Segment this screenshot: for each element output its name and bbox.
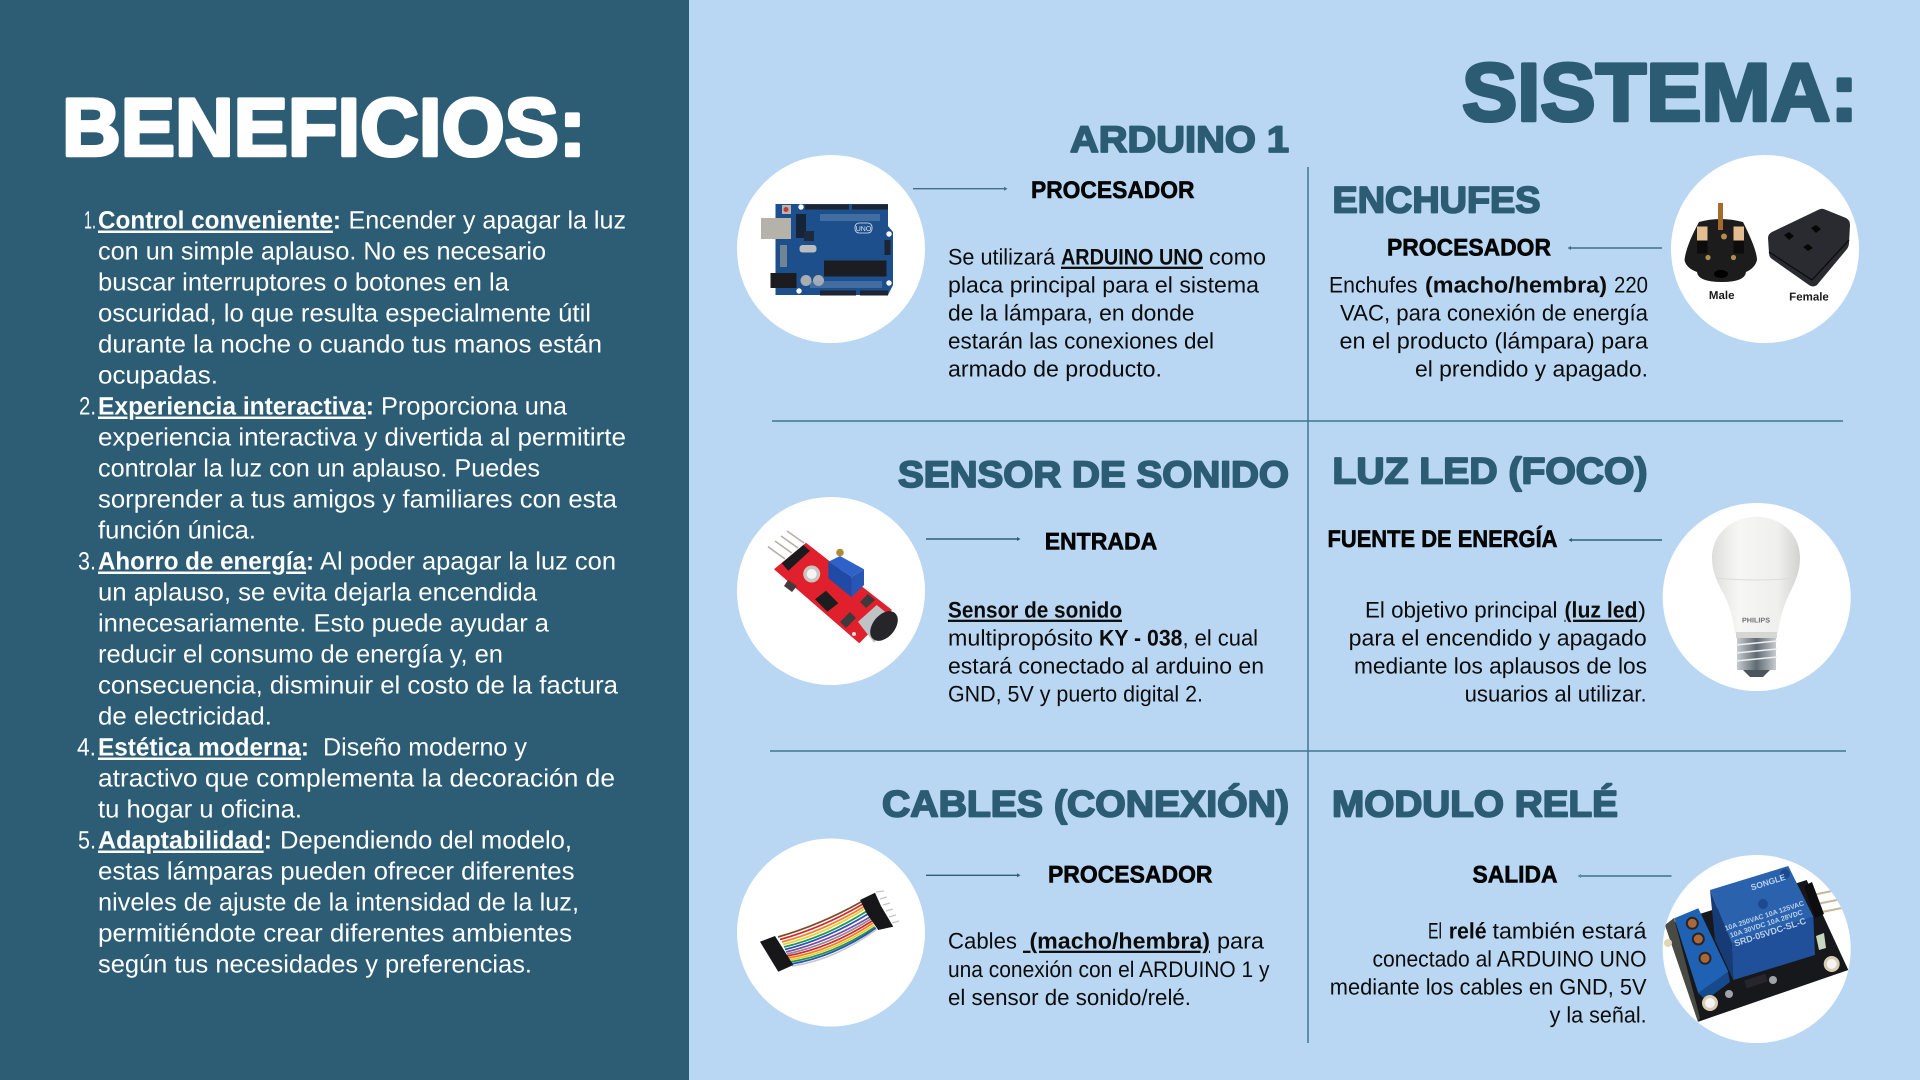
heading: arduino 1: ARDUINO 1 <box>1070 119 1289 160</box>
icon: plugs <box>1671 155 1859 343</box>
benefit 2: experiencia interactiva: experiencia interactiva y divertida al permitirte <box>98 424 626 452</box>
text: cables description <box>948 929 1270 1010</box>
benefit 1: control conveniente: Control conveniente: <box>98 206 341 234</box>
benefit 3: ahorro de energia: consecuencia, disminuir el costo de la factura <box>98 672 618 700</box>
text: led description: mediante los aplausos de los <box>1354 654 1647 679</box>
label: fuente de energia: FUENTE DE ENERGÍA <box>1328 525 1558 553</box>
section: enchufes <box>1329 155 1859 382</box>
text: arduino description: placa principal para el sistema <box>948 273 1259 298</box>
label: procesador: PROCESADOR <box>1048 862 1212 889</box>
heading: cables: CABLES (CONEXIÓN) <box>882 784 1289 824</box>
benefit 4: estetica moderna: Estética moderna: <box>98 734 309 762</box>
text: relay description: El <box>1428 919 1442 944</box>
benefit 3: ahorro de energia: Al poder apagar la luz con <box>320 548 616 576</box>
heading: luz led: LUZ LED (FOCO) <box>1332 450 1648 492</box>
text: sensor description: , el cual <box>1182 626 1258 651</box>
text: arduino description: armado de producto. <box>948 357 1162 382</box>
benefit 3: ahorro de energia: un aplauso, se evita dejarla encendida <box>98 578 537 606</box>
icon: led bulb <box>1663 503 1851 691</box>
arrow <box>926 537 1020 541</box>
text: cables description: una conexión con el ARDUINO 1 y <box>948 957 1270 982</box>
heading: modulo rele: MODULO RELÉ <box>1332 784 1618 824</box>
benefit 5: adaptabilidad: Adaptabilidad: <box>98 826 272 854</box>
heading: BENEFICIOS: BENEFICIOS: <box>62 82 586 174</box>
text: arduino description: como <box>1209 245 1266 270</box>
benefit 2: experiencia interactiva: 2. <box>79 392 96 420</box>
text: sensor description: Sensor de sonido <box>948 598 1122 623</box>
benefit 2: experiencia interactiva: Proporciona una <box>381 392 567 420</box>
text: led description: (luz led <box>1564 598 1638 623</box>
text: relay description: relé <box>1449 919 1487 944</box>
benefit 5: adaptabilidad: estas lámparas pueden ofrecer diferentes <box>98 858 574 886</box>
benefit 2: experiencia interactiva <box>79 392 626 544</box>
icon: plugs: Male <box>1709 290 1734 302</box>
benefit 1: control conveniente: ocupadas. <box>98 362 218 390</box>
heading: SISTEMA: SISTEMA: <box>1462 48 1858 138</box>
benefit 1: control conveniente: con un simple aplauso. No es necesario <box>98 238 546 266</box>
arrow <box>1578 874 1672 878</box>
benefit 5: adaptabilidad: permitiéndote crear diferentes ambientes <box>98 920 572 948</box>
label: salida: SALIDA <box>1472 862 1558 889</box>
arrow <box>1568 538 1662 542</box>
text: arduino description: de la lámpara, en donde <box>948 301 1194 326</box>
benefit 2: experiencia interactiva: Experiencia interactiva: <box>98 392 374 420</box>
benefit 3: ahorro de energia: 3. <box>78 548 96 576</box>
icon: relay module: 10A 250VAC 10A 125VAC <box>1724 900 1805 933</box>
benefit 5: adaptabilidad <box>78 826 579 978</box>
arrow <box>926 873 1020 877</box>
text: arduino description: ARDUINO UNO <box>1061 245 1203 270</box>
text: enchufes description: 220 <box>1614 273 1648 298</box>
text: enchufes description: el prendido y apagado. <box>1415 357 1648 382</box>
benefit 2: experiencia interactiva: sorprender a tus amigos y familiares con esta <box>98 486 617 514</box>
benefit 1: control conveniente: durante la noche o cuando tus manos están <box>98 330 602 358</box>
arrow <box>1568 246 1662 250</box>
icon: relay module: SRD-05VDC-SL-C <box>1733 916 1808 948</box>
text: led description: usuarios al utilizar. <box>1465 682 1647 707</box>
benefit 2: experiencia interactiva: controlar la luz con un aplauso. Puedes <box>98 454 540 482</box>
text: enchufes description: Enchufes <box>1329 273 1418 298</box>
heading: enchufes: ENCHUFES <box>1332 180 1540 220</box>
text: enchufes description <box>1329 273 1648 382</box>
benefit 3: ahorro de energia <box>78 548 618 730</box>
text: cables description: el sensor de sonido/relé. <box>948 985 1191 1010</box>
text: led description: ) <box>1638 598 1646 623</box>
label: procesador: PROCESADOR <box>1031 177 1194 204</box>
benefit 5: adaptabilidad: niveles de ajuste de la intensidad de la luz, <box>98 888 579 916</box>
benefit 4: estetica moderna <box>77 734 615 824</box>
icon: led bulb: PHILIPS <box>1742 618 1770 624</box>
benefit 1: control conveniente: Encender y apagar la luz <box>348 206 626 234</box>
background: system panel <box>689 0 1920 1080</box>
benefit 3: ahorro de energia: Ahorro de energía: <box>98 548 314 576</box>
icon: arduino board: UNO <box>856 226 872 233</box>
text: enchufes description: en el producto (lámpara) para <box>1340 329 1648 354</box>
icon: relay module: SONGLE <box>1749 872 1787 892</box>
heading: sensor de sonido: SENSOR DE SONIDO <box>898 454 1289 495</box>
benefit 4: estetica moderna: 4. <box>77 734 96 762</box>
text: led description: para el encendido y apagado <box>1349 626 1647 651</box>
section: cables <box>737 784 1289 1026</box>
benefit 4: estetica moderna: Diseño moderno y <box>323 734 527 762</box>
icon: arduino board <box>737 155 925 343</box>
text: relay description: también estará <box>1492 919 1647 944</box>
text: cables description: (macho/hembra) <box>1023 929 1210 954</box>
text: relay description <box>1330 919 1647 1028</box>
text: cables description: Cables <box>948 929 1017 954</box>
section: modulo rele <box>1330 784 1851 1043</box>
benefit 1: control conveniente: oscuridad, lo que resulta especialmente útil <box>98 300 591 328</box>
icon: plugs: Female <box>1789 292 1829 304</box>
section: sensor de sonido <box>737 454 1289 707</box>
benefit 3: ahorro de energia: reducir el consumo de energía y, en <box>98 640 503 668</box>
text: cables description: para <box>1217 929 1264 954</box>
text: sensor description: GND, 5V y puerto digital 2. <box>948 682 1203 707</box>
text: enchufes description: (macho/hembra) <box>1425 273 1607 298</box>
text: led description: El objetivo principal <box>1365 598 1558 623</box>
arrow <box>913 187 1008 191</box>
benefit 3: ahorro de energia: de electricidad. <box>98 702 272 730</box>
text: sensor description: KY - 038 <box>1099 626 1182 651</box>
benefit 5: adaptabilidad: 5. <box>78 826 96 854</box>
text: arduino description: Se utilizará <box>948 245 1055 270</box>
icon: jumper cables <box>737 838 925 1026</box>
text: arduino description: estarán las conexiones del <box>948 329 1214 354</box>
text: sensor description: multipropósito <box>948 626 1093 651</box>
label: entrada: ENTRADA <box>1045 528 1157 556</box>
text: arduino description <box>948 245 1266 382</box>
section: arduino <box>737 119 1289 382</box>
text: relay description: mediante los cables en GND, 5V <box>1330 975 1647 1000</box>
benefit 4: estetica moderna: atractivo que complementa la decoración de <box>98 764 615 792</box>
text: sensor description: estará conectado al arduino en <box>948 654 1264 679</box>
icon: sound sensor <box>737 497 925 685</box>
text: relay description: conectado al ARDUINO UNO <box>1372 947 1646 972</box>
text: sensor description <box>948 598 1264 707</box>
benefit 1: control conveniente <box>84 206 626 390</box>
text: relay description: y la señal. <box>1550 1003 1647 1028</box>
icon: relay module: 10A 30VDC 10A 28VDC <box>1729 909 1804 940</box>
text: led description <box>1349 598 1647 707</box>
benefit 5: adaptabilidad: Dependiendo del modelo, <box>280 826 572 854</box>
panel: beneficios <box>0 0 689 1080</box>
benefit 3: ahorro de energia: innecesariamente. Esto puede ayudar a <box>98 610 549 638</box>
benefit 1: control conveniente: buscar interruptores o botones en la <box>98 268 509 296</box>
section: luz led <box>1328 450 1851 707</box>
label: procesador: PROCESADOR <box>1387 234 1551 262</box>
benefit 2: experiencia interactiva: función única. <box>98 516 256 544</box>
benefit 1: control conveniente: 1. <box>84 206 96 234</box>
text: enchufes description: VAC, para conexión de energía <box>1340 301 1648 326</box>
icon: relay module <box>1663 855 1851 1043</box>
benefit 5: adaptabilidad: según tus necesidades y preferencias. <box>98 950 532 978</box>
benefit 4: estetica moderna: tu hogar u oficina. <box>98 796 302 824</box>
